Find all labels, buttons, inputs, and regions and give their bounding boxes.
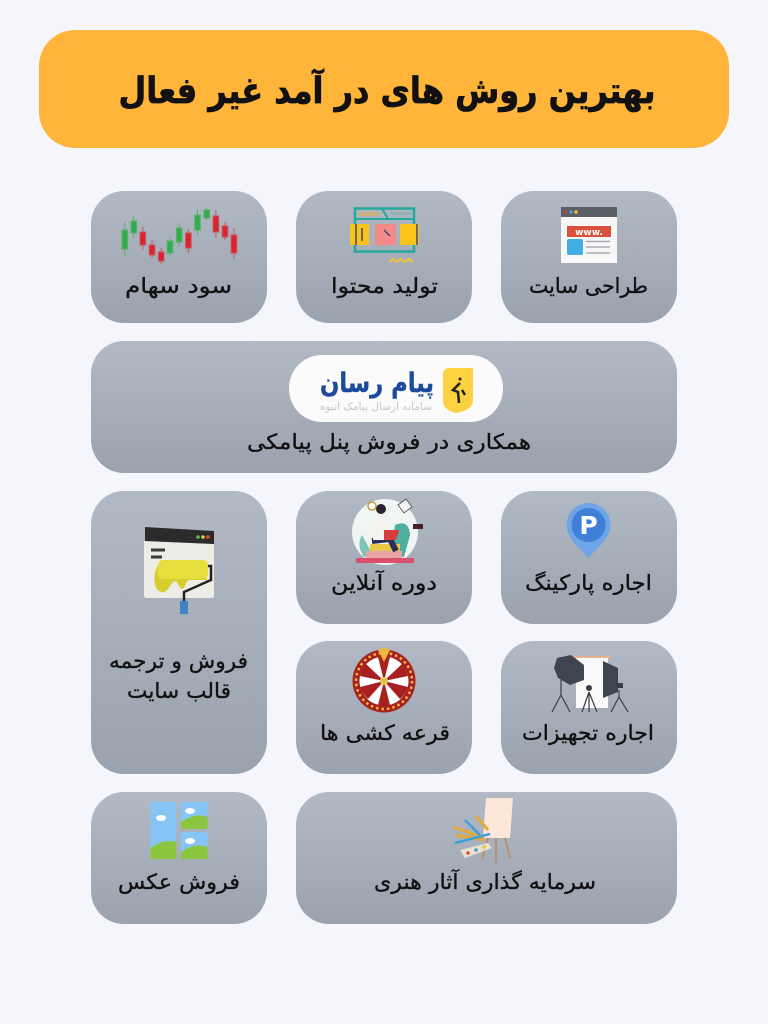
icon: parking pin <box>566 503 610 558</box>
panel: parking rental <box>501 491 677 624</box>
label: سود سهام <box>125 274 232 298</box>
icon: easel and brushes <box>453 798 513 863</box>
title banner <box>39 30 729 148</box>
label: دوره آنلاین <box>331 570 437 595</box>
label: سرمایه گذاری آثار هنری <box>374 869 596 894</box>
panel: website design <box>501 191 677 323</box>
panel: online course <box>296 491 472 624</box>
icon: website window <box>561 207 617 263</box>
label: اجاره پارکینگ <box>525 571 652 595</box>
panel: art investment <box>296 792 677 924</box>
title text: بهترین روش های در آمد غیر فعال <box>118 68 656 112</box>
icon: student on books <box>352 499 423 565</box>
logo: Payam Resan <box>289 355 503 422</box>
label: قالب سایت <box>127 679 231 703</box>
label <box>109 649 248 703</box>
label: اجاره تجهیزات <box>522 721 654 745</box>
label: قرعه کشی ها <box>320 721 450 745</box>
icon: candlestick chart <box>122 208 237 264</box>
icon: parking pin: P <box>579 511 598 540</box>
label: همکاری در فروش پنل پیامکی <box>247 430 531 454</box>
icon: prize wheel <box>352 648 416 712</box>
panel: content production <box>296 191 472 323</box>
panel: photo sales <box>91 792 267 924</box>
label: فروش عکس <box>118 870 240 894</box>
panel: lottery <box>296 641 472 774</box>
panel: equipment rental <box>501 641 677 774</box>
logo wordmark: پیام رسان <box>320 368 434 399</box>
panel: SMS panel sales <box>91 341 677 473</box>
label: تولید محتوا <box>331 274 438 298</box>
panel: theme sales and translation <box>91 491 267 774</box>
icon: photo collage <box>150 802 208 859</box>
icon: content window <box>350 208 419 262</box>
logo tagline: سامانه ارسال پیامک انبوه <box>320 401 432 413</box>
label: فروش و ترجمه <box>109 649 248 673</box>
icon: photo studio <box>552 655 628 712</box>
label: طراحی سایت <box>529 274 648 298</box>
panel: stock dividends <box>91 191 267 323</box>
icon: website window: www. <box>575 228 603 238</box>
logo shield <box>443 368 473 413</box>
icon: paint roller on window <box>144 527 214 614</box>
